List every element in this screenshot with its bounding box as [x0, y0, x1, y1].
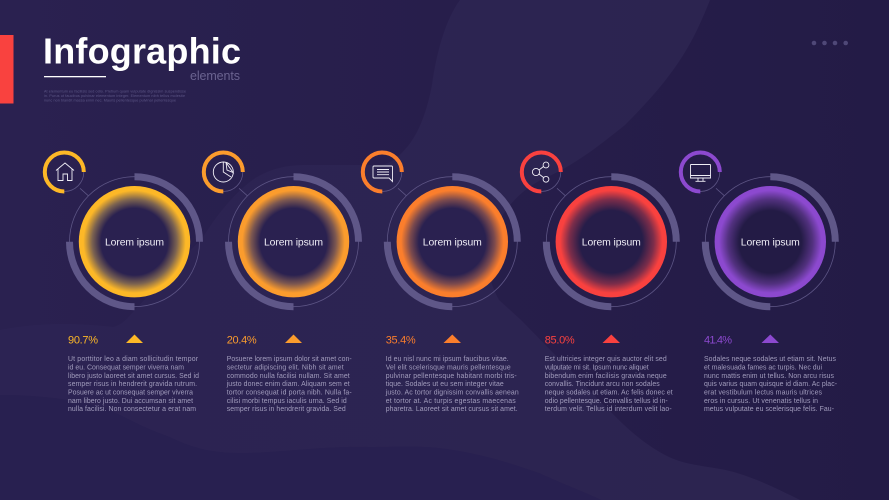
accent bar: [0, 35, 14, 104]
text block 4: terdum velit. Tellus id interdum velit lao-: [545, 406, 672, 413]
percentage 5: 41.4%: [704, 334, 732, 346]
icon: pie chart: [204, 152, 243, 192]
panel: item 5: [681, 152, 837, 413]
text block 5: eros in cursus. Ut venenatis tellus in: [704, 398, 818, 405]
title: Infographic: [43, 30, 241, 72]
text block 2: commodo nulla facilisi nullam. Sit amet: [227, 373, 350, 380]
icon: home: [45, 152, 84, 192]
main ring 2: [228, 177, 358, 307]
icon: chat bubble: [363, 152, 402, 192]
text block 4: bibendum enim facilisis gravida neque: [545, 373, 667, 380]
text block 4: convallis. Tincidunt arcu non sodales: [545, 381, 660, 388]
text block 3: et tortor at. Ac turpis egestas maecenas: [386, 398, 516, 405]
text block 2: cilisi morbi tempus iaculis urna. Sed id: [227, 398, 347, 405]
icon: share: [522, 152, 561, 192]
text block 2: sectetur adipiscing elit. Nibh sit amet: [227, 364, 344, 371]
icon: monitor: [681, 152, 720, 192]
panel: item 4: [522, 152, 676, 413]
connector 5: [716, 188, 724, 196]
text block 1: nam libero justo. Dui accumsan sit amet: [68, 398, 193, 405]
menu dots: [812, 41, 848, 45]
text block 5: metus vulputate eu scelerisque felis. Fau-: [704, 406, 834, 413]
text block 1: libero justo laoreet sit amet cursus. Sed id: [68, 373, 199, 380]
text block 3: [385, 356, 519, 413]
text block 1: semper risus in hendrerit gravida rutrum.: [68, 381, 197, 388]
text block 4: [545, 356, 673, 413]
text block 1: id eu. Consequat semper viverra nam: [68, 364, 184, 371]
intro text: nunc non blandit massa enim nec. Mauris pellentesque pulvinar pellentesque: [44, 98, 176, 102]
text block 3: justo. Ac tortor dignissim convallis aenean: [385, 390, 519, 396]
text block 5: Sodales neque sodales ut etiam sit. Netus: [704, 356, 837, 363]
title underline: [44, 76, 106, 77]
connector 3: [398, 188, 406, 196]
text block 3: Vel elit scelerisque mauris pellentesque: [386, 364, 511, 371]
text block 5: quis varius quam quisque id diam. Ac plac-: [704, 381, 837, 388]
percentage 3: 35.4%: [386, 334, 416, 346]
percentage 4: 85.0%: [545, 334, 575, 346]
panel: item 1: [45, 152, 200, 413]
arrow 4: [602, 334, 620, 343]
main ring 1: Lorem ipsum: [105, 237, 164, 248]
main ring 5: [705, 177, 835, 307]
intro text: At elementum eu facilisis sed odio. Pretium quam vulputate dignissim suspendisse: [44, 90, 186, 94]
text block 4: odio pellentesque. Convallis tellus id in-: [545, 398, 668, 405]
arrow 5: [762, 334, 779, 343]
text block 1: Posuere ac ut consequat semper viverra: [68, 390, 193, 396]
text block 1: Ut porttitor leo a diam sollicitudin tempor: [68, 356, 199, 363]
text block 5: nunc mattis enim ut tellus. Non arcu risus: [704, 373, 835, 380]
arrow 1: [126, 334, 143, 343]
percentage 1: 90.7%: [68, 334, 98, 346]
arrow 3: [444, 334, 461, 343]
text block 3: Id eu nisl nunc mi ipsum faucibus vitae.: [386, 356, 509, 363]
text block 1: nulla facilisi. Non consectetur a erat nam: [68, 406, 196, 413]
subtitle: elements: [190, 69, 240, 83]
text block 1: [68, 356, 199, 413]
connector 1: [80, 188, 88, 196]
main ring 3: [387, 177, 517, 307]
main ring 4: Lorem ipsum: [582, 237, 641, 248]
main ring 5: Lorem ipsum: [741, 237, 800, 248]
intro text: [44, 90, 186, 102]
panel: item 2: [204, 152, 358, 413]
main ring 2: Lorem ipsum: [264, 237, 323, 248]
text block 3: pharetra. Laoreet sit amet cursus sit amet.: [386, 406, 518, 413]
text block 2: [226, 356, 352, 413]
main ring 3: Lorem ipsum: [423, 237, 482, 248]
text block 5: [704, 356, 837, 413]
text block 4: vulputate mi sit. Ipsum nunc aliquet: [545, 364, 649, 371]
main ring 1: [70, 177, 200, 307]
text block 4: Est ultricies integer quis auctor elit sed: [545, 356, 667, 363]
percentage 2: 20.4%: [227, 334, 257, 346]
connector 2: [239, 188, 247, 196]
text block 5: et malesuada fames ac turpis. Nec dui: [704, 364, 822, 371]
text block 2: semper risus in hendrerit gravida. Sed: [227, 406, 346, 413]
text block 3: tique. Sodales ut eu sem integer vitae: [386, 381, 504, 388]
text block 2: tortor consequat id porta nibh. Nulla fa-: [227, 390, 352, 396]
main ring 4: [546, 177, 676, 307]
panel: item 3: [363, 152, 519, 413]
intro text: in. Purus ut faucibus pulvinar elementum integer. Elementum nibh tellus molestie: [44, 94, 185, 98]
text block 2: justo donec enim diam. Aliquam sem et: [226, 381, 350, 388]
connector 4: [557, 188, 565, 196]
text block 5: erat vestibulum lectus mauris ultrices: [704, 390, 823, 396]
text block 3: pulvinar pellentesque habitant morbi tris-: [386, 373, 517, 380]
text block 4: neque sodales ut etiam. Ac felis donec et: [545, 390, 673, 396]
arrow 2: [285, 334, 302, 343]
text block 2: Posuere lorem ipsum dolor sit amet con-: [227, 356, 352, 363]
